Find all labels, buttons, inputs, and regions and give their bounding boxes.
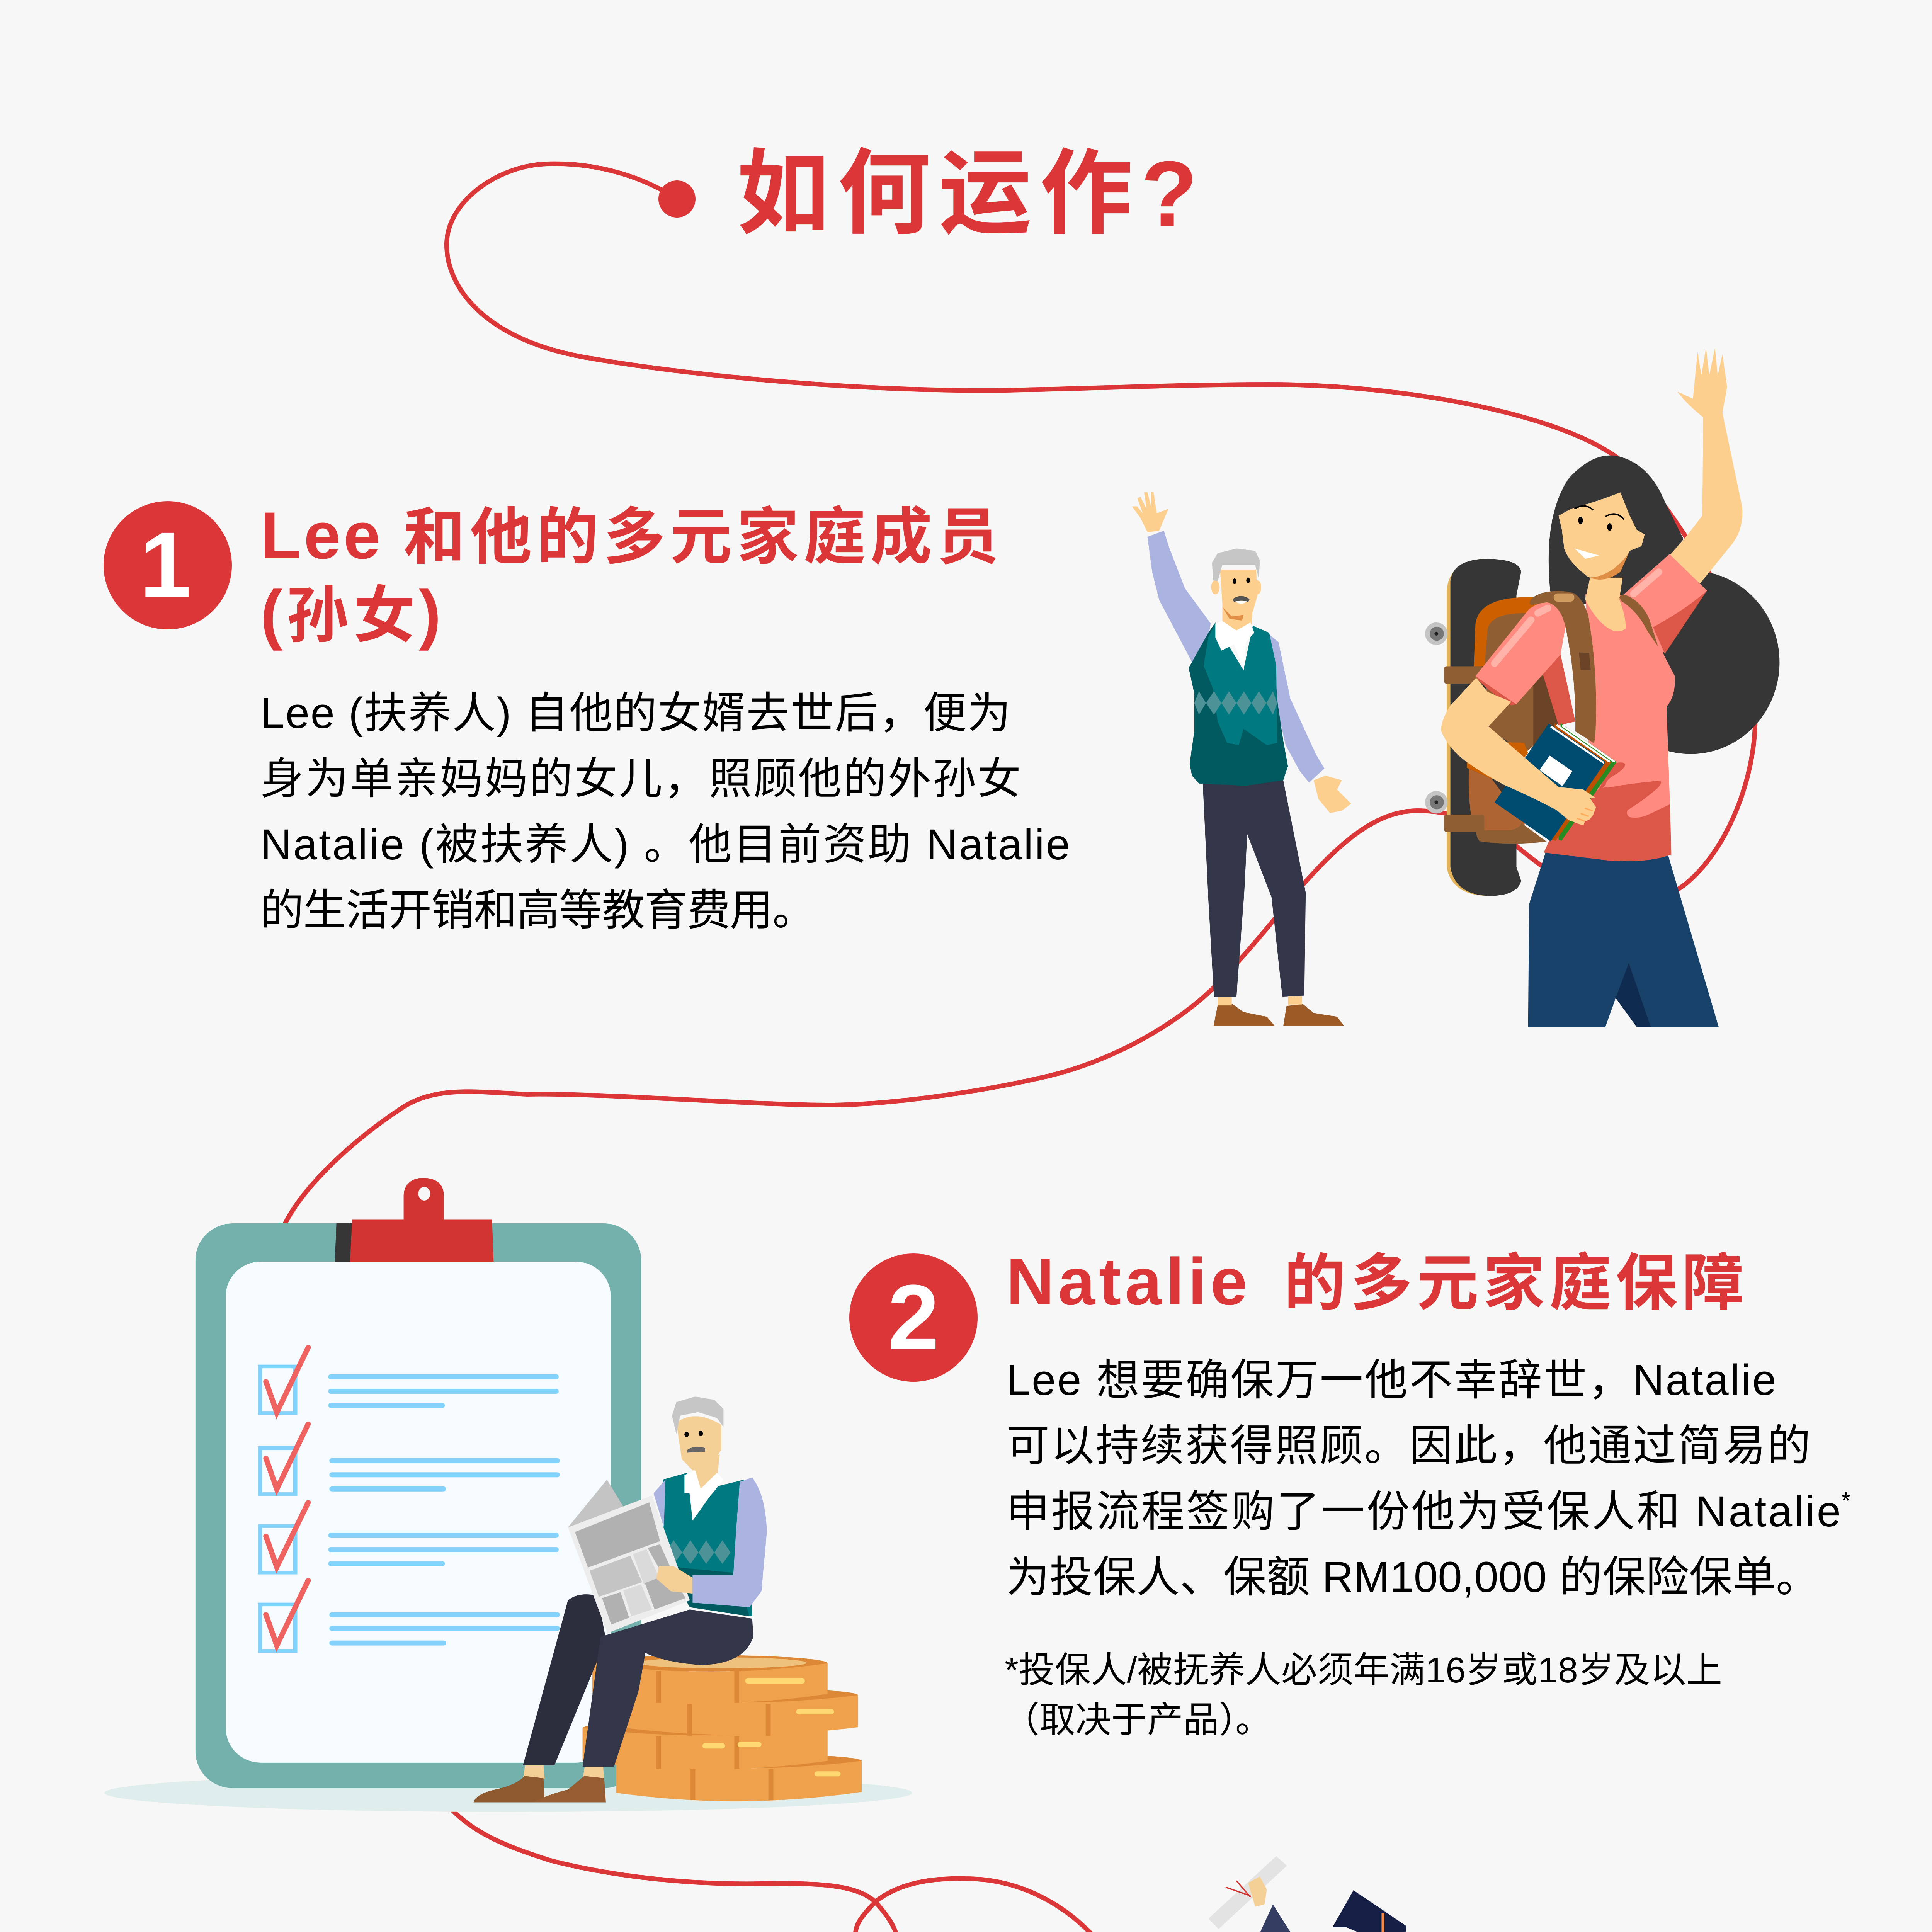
heading: step 1: Lee bbox=[260, 498, 383, 573]
start dot bbox=[658, 180, 696, 218]
clipboard bbox=[196, 1178, 641, 1788]
text block: step 1: Natalie (被扶养人) 。他目前资助 Natalie bbox=[260, 820, 1070, 869]
heading: step 1: ( bbox=[260, 577, 283, 651]
footnote: （取决于产品） bbox=[1003, 1700, 1255, 1740]
number badge 2 bbox=[849, 1253, 978, 1382]
text block: step 1: Lee (扶养人) 自他的女婿去世后，便为 bbox=[260, 689, 1011, 737]
heading: step 1: 孙女 bbox=[287, 581, 420, 650]
number badge 1: 1 bbox=[139, 513, 191, 616]
text block: step 2: 申报流程签购了一份他为受保人和 Natalie bbox=[1006, 1487, 1841, 1536]
text block: step 1 bbox=[260, 689, 1070, 934]
text block: step 1: 身为单亲妈妈的女儿，照顾他的外孙女 bbox=[260, 755, 1021, 803]
figure: grandfather reading newspaper bbox=[474, 1396, 767, 1803]
figure: graduate bbox=[1208, 1856, 1473, 1932]
figure: granddaughter with skateboard, backpack and books bbox=[1425, 348, 1779, 1027]
heading: step 1: 和他的多元家庭成员 bbox=[403, 502, 1003, 571]
footnote: 。 bbox=[1235, 1700, 1271, 1740]
text block: step 2: 为投保人、保额 RM100,000 的保险保单。 bbox=[1006, 1553, 1819, 1601]
illustration: grandfather and granddaughter waving bbox=[1132, 348, 1779, 1027]
text block: step 2: Lee 想要确保万一他不幸辞世，Natalie bbox=[1006, 1356, 1776, 1404]
ground shadow bbox=[104, 1774, 912, 1812]
checklist bbox=[260, 1347, 560, 1651]
text block: step 2: 可以持续获得照顾。因此，他通过简易的 bbox=[1006, 1422, 1811, 1470]
illustration: clipboard with checklist and grandfather reading on coins bbox=[104, 1178, 912, 1812]
footnote bbox=[1003, 1650, 1722, 1740]
heading: step 2: 的多元家庭保障 bbox=[1284, 1248, 1748, 1318]
footnote: *投保人/被抚养人必须年满16岁或18岁及以上 bbox=[1005, 1650, 1722, 1690]
text block: step 2 bbox=[1006, 1356, 1850, 1601]
heading: step 1: ) bbox=[419, 577, 441, 651]
number badge 1 bbox=[104, 501, 232, 629]
figure: grandfather waving bbox=[1132, 492, 1351, 1026]
coin stack bbox=[583, 1655, 862, 1801]
connector line: clipboard to end dot bbox=[440, 1797, 1669, 1932]
text block: step 2: * bbox=[1841, 1488, 1850, 1514]
heading: step 2: Natalie bbox=[1006, 1245, 1251, 1319]
illustration: graduate on books with money bags bbox=[1036, 1856, 1602, 1932]
connector line: title to clipboard bbox=[284, 164, 1755, 1225]
text block: step 1: 的生活开销和高等教育费用。 bbox=[260, 886, 816, 934]
title: 如何运作? bbox=[737, 142, 1197, 245]
number badge 2: 2 bbox=[888, 1265, 939, 1369]
